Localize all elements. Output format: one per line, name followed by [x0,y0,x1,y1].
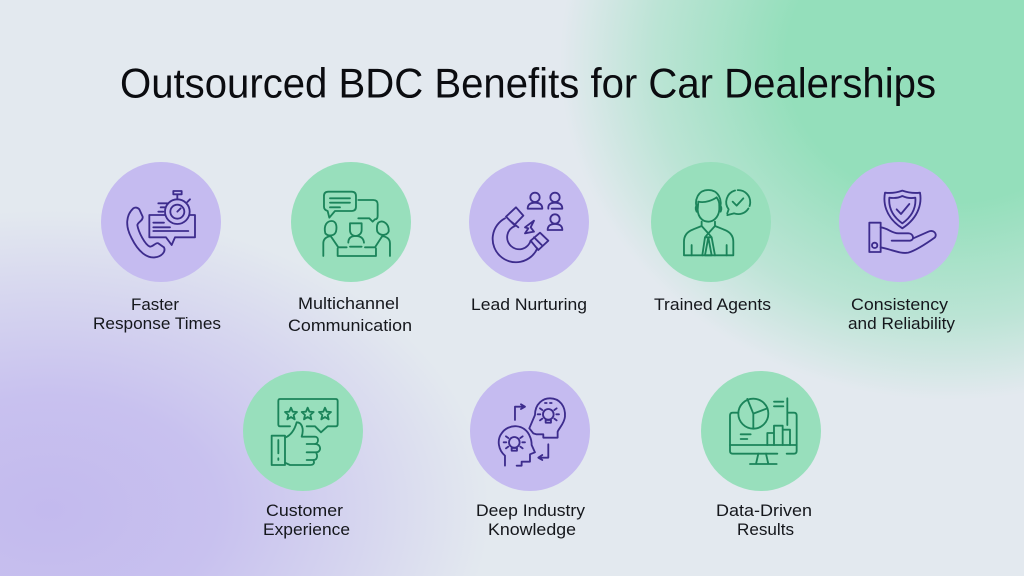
title: Outsourced BDC Benefits for Car Dealerships [120,60,936,106]
label: Faster [131,296,180,314]
icon: hand holding shield [869,191,936,253]
item: Faster Response Times [93,162,221,333]
label [93,296,221,333]
label: Consistency [851,296,949,314]
label: and Reliability [848,315,956,333]
circle: customer experience [243,371,363,491]
label: Response Times [93,315,221,333]
circle: multichannel [291,162,411,282]
icon: thumbs up with star rating [272,399,338,465]
item: Multichannel Communication [288,162,412,335]
label: Data-Driven [716,502,812,520]
label: Experience [263,521,350,539]
label: Multichannel [298,295,399,313]
icon: phone and stopwatch [127,191,195,257]
circle: deep industry knowledge [470,371,590,491]
label: Lead Nurturing [471,296,587,314]
label: Communication [288,317,412,335]
item: Trained Agents [651,162,771,314]
item: Deep Industry Knowledge [470,371,590,539]
label [288,295,412,335]
circle: faster response [101,162,221,282]
label: Customer [266,502,344,520]
label: Knowledge [488,521,576,539]
label [716,502,812,539]
item: Customer Experience [243,371,363,539]
circle: consistency [839,162,959,282]
label: Deep Industry [476,502,586,520]
circle: trained agents [651,162,771,282]
item: Consistency and Reliability [839,162,959,333]
circle: data-driven results [701,371,821,491]
icon: monitor with charts [730,398,797,464]
circle: lead nurturing [469,162,589,282]
label: Trained Agents [654,296,771,314]
icon: team with chat bubbles [323,192,390,256]
label [476,502,586,539]
item: Data-Driven Results [701,371,821,539]
icon: magnet attracting people [493,193,562,262]
label: Results [737,521,794,539]
icon: two heads with lightbulbs [499,398,565,466]
icon: agent with check bubble [684,190,750,255]
item: Lead Nurturing [469,162,589,314]
label [848,296,956,333]
label [263,502,350,539]
